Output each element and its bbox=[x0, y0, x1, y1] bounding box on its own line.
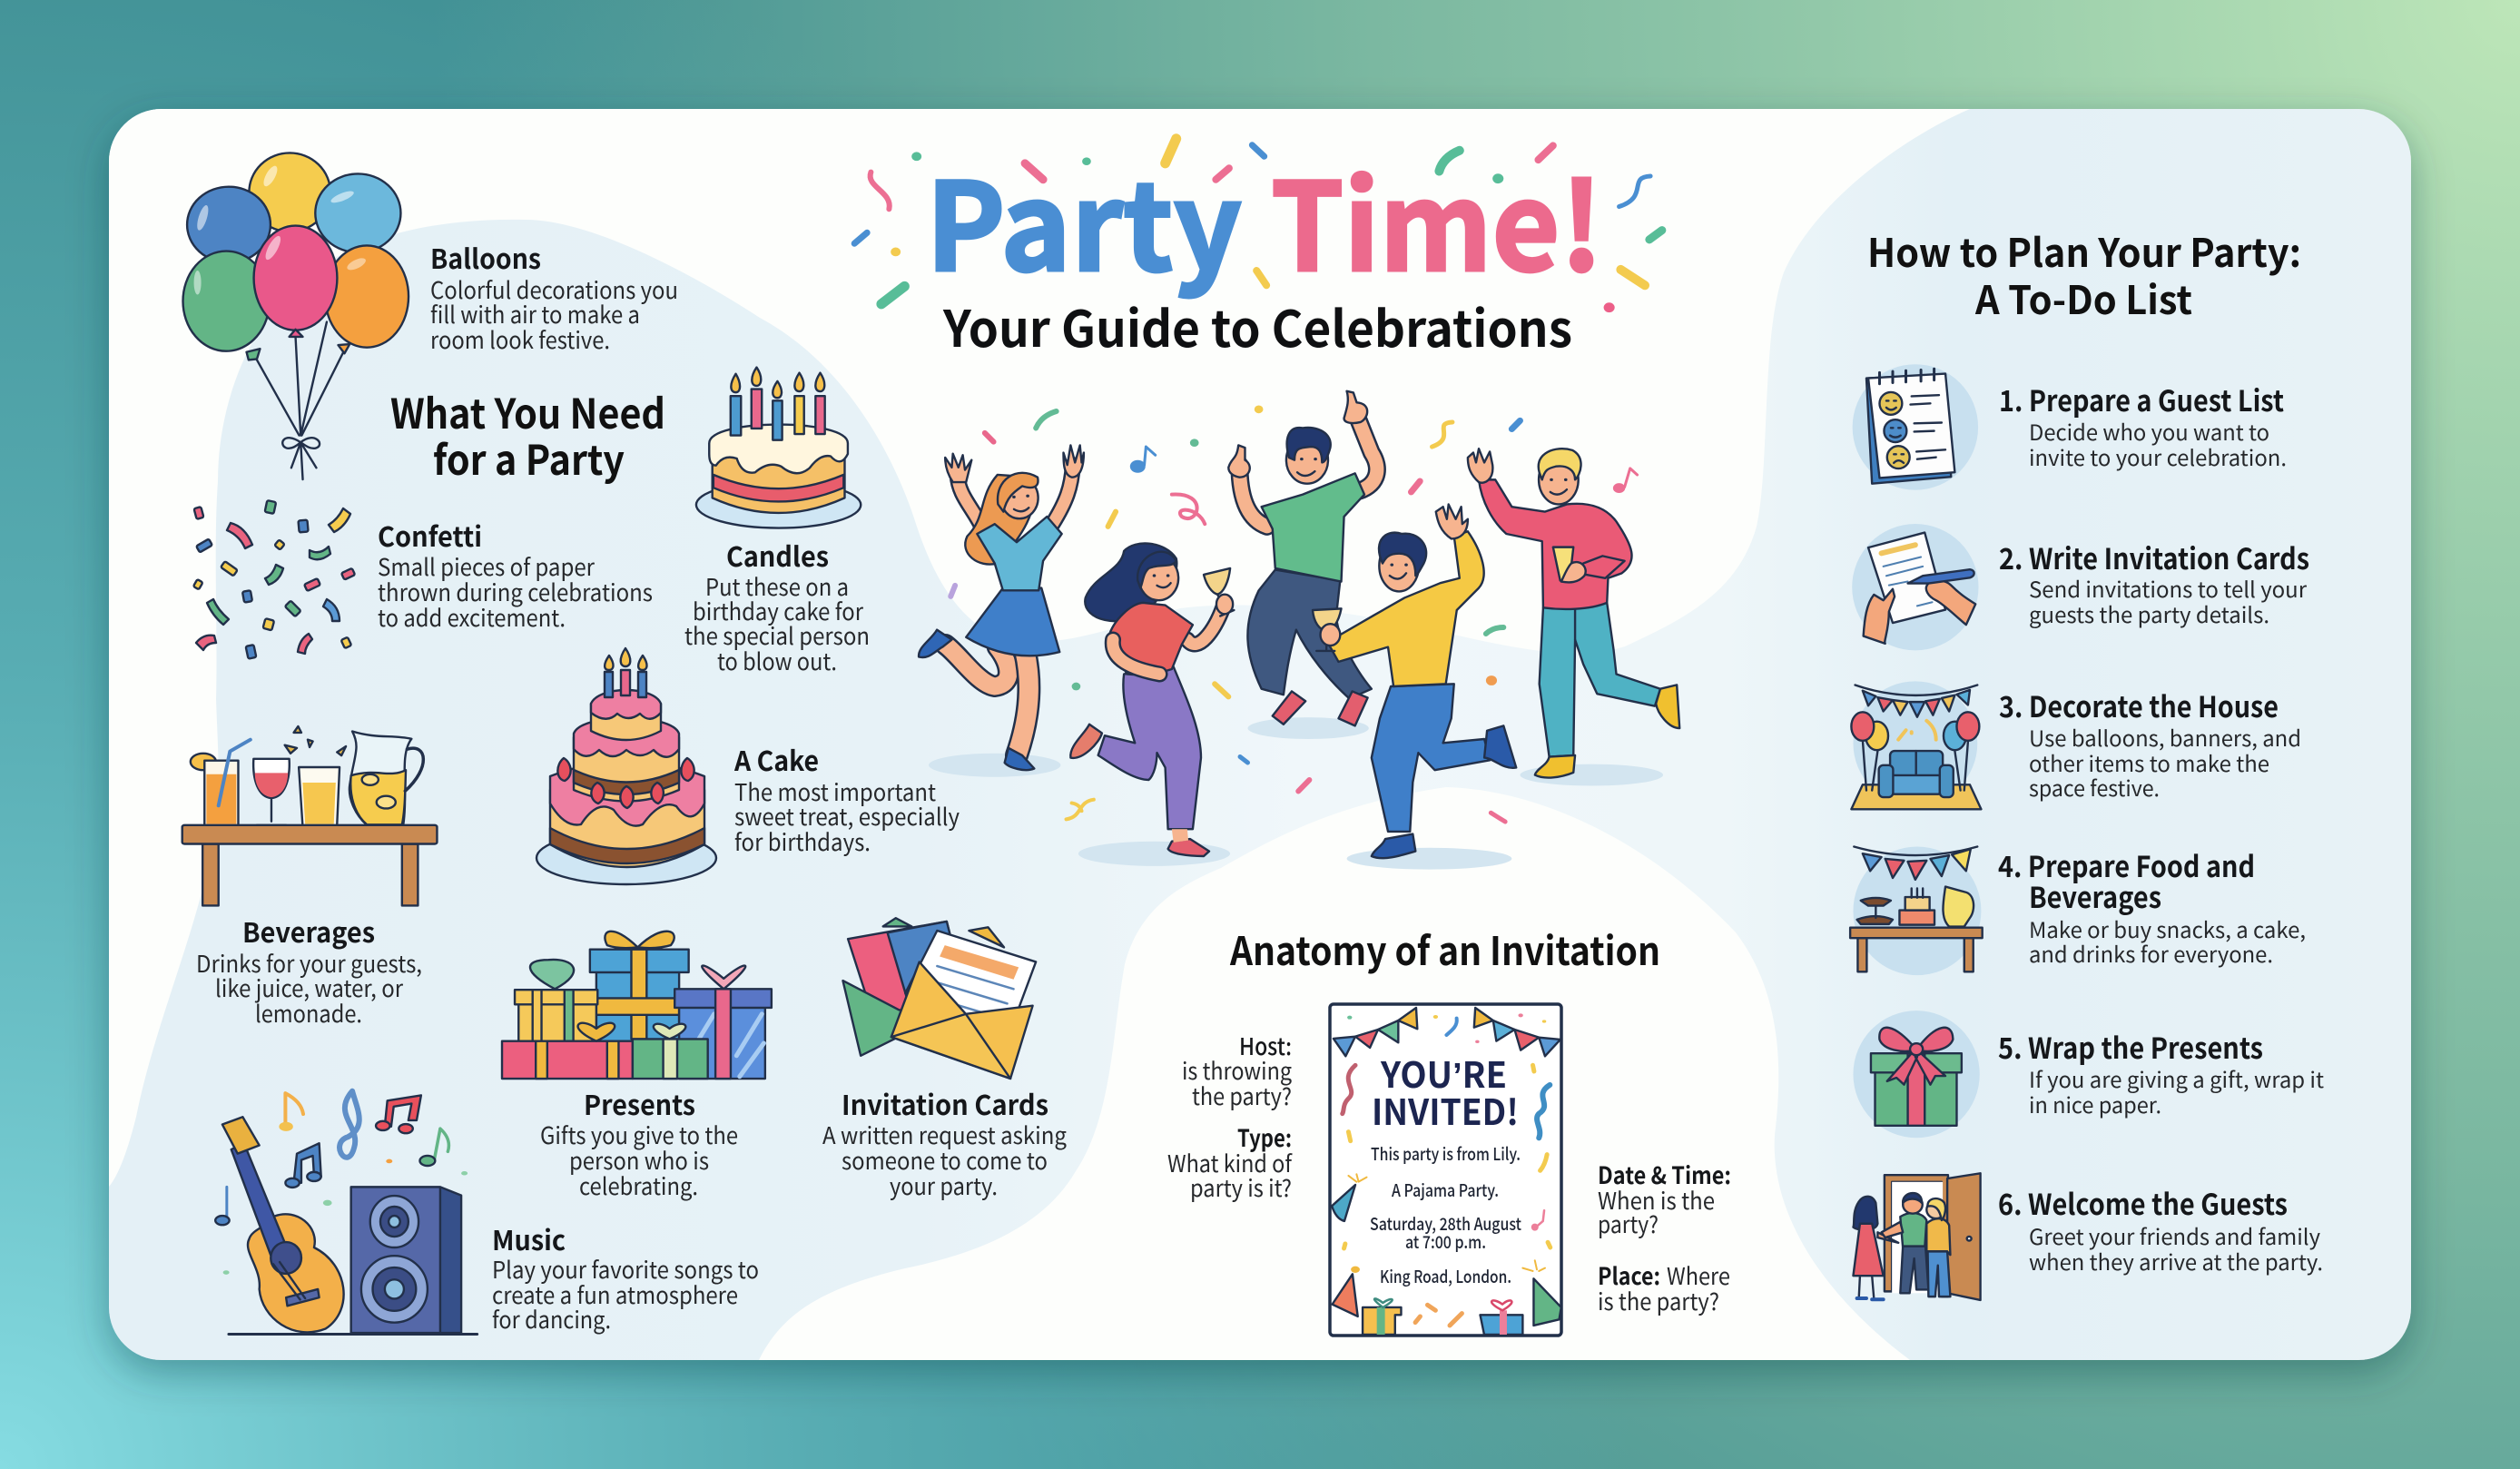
heading: to-do list: A To-Do List bbox=[1974, 270, 2192, 326]
text: step 1: invite to your celebration. bbox=[2029, 440, 2287, 472]
text: step 4: and drinks for everyone. bbox=[2029, 937, 2273, 969]
title block bbox=[854, 130, 1662, 361]
text: beverages bbox=[196, 911, 422, 1030]
text: step 5: in nice paper. bbox=[2029, 1088, 2161, 1119]
card text: INVITED! bbox=[1372, 1085, 1519, 1136]
labels left: host and type bbox=[1167, 1029, 1293, 1204]
text: balloons: room look festive. bbox=[430, 322, 610, 356]
text: candles: Put these on a bbox=[705, 569, 849, 603]
text: step 5: 5. Wrap the Presents bbox=[1998, 1026, 2263, 1068]
icon: birthday cake with candles bbox=[696, 368, 861, 528]
dancer: woman in blue dress bbox=[919, 445, 1084, 770]
text: step 5 bbox=[1998, 1026, 2324, 1119]
text: music: Music bbox=[492, 1218, 566, 1258]
text: invitation cards bbox=[822, 1083, 1067, 1202]
main rounded card bbox=[109, 109, 2411, 1360]
text: a cake bbox=[733, 739, 960, 858]
dance confetti bbox=[950, 406, 1638, 822]
text: balloons: Colorful decorations you bbox=[430, 272, 678, 306]
text: presents: person who is bbox=[569, 1143, 709, 1177]
text: music: create a fun atmosphere bbox=[492, 1277, 738, 1311]
card decorations bbox=[1332, 1008, 1561, 1335]
labels right: date, time and place: Place: bbox=[1598, 1258, 1660, 1292]
icon: tiered cake bbox=[536, 648, 716, 884]
text: invitation cards: Invitation Cards bbox=[842, 1083, 1048, 1123]
text: step 2 bbox=[1999, 537, 2309, 629]
title confetti bbox=[854, 139, 1662, 312]
subtitle: Your Guide to Celebrations bbox=[942, 289, 1572, 361]
text: step 1: 1. Prepare a Guest List bbox=[1999, 379, 2284, 420]
text: candles bbox=[684, 535, 870, 677]
labels left: host and type: Host: bbox=[1239, 1029, 1292, 1062]
labels right: date, time and place: Date & Time: bbox=[1598, 1158, 1731, 1191]
text: step 4: Make or buy snacks, a cake, bbox=[2029, 912, 2306, 944]
labels right: date, time and place: party? bbox=[1598, 1207, 1659, 1240]
text: step 1: Decide who you want to bbox=[2029, 415, 2269, 447]
text: step 6: Greet your friends and family bbox=[2029, 1219, 2320, 1251]
text: step 4: 4. Prepare Food and bbox=[1998, 844, 2255, 886]
text: step 3: Use balloons, banners, and bbox=[2029, 721, 2301, 753]
text: step 2: guests the party details. bbox=[2029, 597, 2269, 629]
text: beverages: lemonade. bbox=[255, 996, 362, 1030]
text: step 6 bbox=[1998, 1182, 2323, 1277]
heading: to-do list: How to Plan Your Party: bbox=[1867, 222, 2301, 279]
labels right: date, time and place: When is the bbox=[1598, 1183, 1715, 1217]
icon: welcoming guests at the door bbox=[1853, 1173, 1981, 1300]
text: candles: Candles bbox=[726, 535, 829, 575]
labels left: host and type: party is it? bbox=[1190, 1170, 1292, 1204]
labels left: host and type: Type: bbox=[1237, 1120, 1292, 1154]
text: a cake: sweet treat, especially bbox=[734, 799, 960, 833]
icon: guitar, speaker and music notes bbox=[215, 1091, 477, 1335]
text: balloons: fill with air to make a bbox=[430, 297, 640, 330]
card text: Saturday, 28th August bbox=[1370, 1211, 1521, 1236]
labels left: host and type: What kind of bbox=[1167, 1146, 1293, 1179]
icon: wrapped gift bbox=[1853, 1011, 1980, 1138]
text: a cake: for birthdays. bbox=[734, 824, 871, 858]
text: presents: Presents bbox=[584, 1083, 695, 1123]
labels left: host and type: is throwing bbox=[1182, 1053, 1292, 1087]
text: a cake: The most important bbox=[734, 774, 936, 808]
text: invitation cards: someone to come to bbox=[842, 1143, 1048, 1177]
text: step 5: If you are giving a gift, wrap it bbox=[2029, 1062, 2324, 1094]
text: step 6: when they arrive at the party. bbox=[2029, 1245, 2323, 1277]
text: step 6: 6. Welcome the Guests bbox=[1998, 1182, 2288, 1224]
title: Party Time!: Party bbox=[926, 130, 1242, 306]
text: music bbox=[492, 1218, 759, 1336]
icon: confetti bbox=[193, 500, 355, 659]
dancer: woman in red top bbox=[1070, 543, 1234, 856]
text: step 1 bbox=[1999, 379, 2287, 472]
labels left: host and type: the party? bbox=[1192, 1079, 1292, 1112]
sample invitation card bbox=[1330, 1004, 1561, 1336]
panel: how to plan your party bbox=[1850, 222, 2324, 1300]
text: step 2: 2. Write Invitation Cards bbox=[1999, 537, 2309, 578]
labels right: date, time and place: Where bbox=[1667, 1258, 1730, 1292]
text: balloons bbox=[430, 237, 678, 356]
text: invitation cards: your party. bbox=[890, 1168, 998, 1202]
text: a cake: A Cake bbox=[733, 739, 819, 779]
card text: King Road, London. bbox=[1380, 1264, 1511, 1288]
labels right: date, time and place bbox=[1598, 1158, 1731, 1317]
card text: This party is from Lily. bbox=[1371, 1141, 1521, 1166]
text: candles: to blow out. bbox=[717, 644, 837, 677]
panel: anatomy of an invitation bbox=[1167, 921, 1731, 1336]
text: beverages: Beverages bbox=[242, 911, 375, 951]
text: confetti: Confetti bbox=[378, 515, 482, 555]
text: step 3: 3. Decorate the House bbox=[1999, 685, 2279, 726]
text: beverages: like juice, water, or bbox=[215, 971, 404, 1004]
text: presents: celebrating. bbox=[579, 1168, 698, 1202]
text: confetti: thrown during celebrations bbox=[378, 575, 653, 608]
text: confetti: to add excitement. bbox=[378, 600, 566, 634]
card text: at 7:00 p.m. bbox=[1405, 1229, 1486, 1254]
icon: writing invitation bbox=[1852, 524, 1979, 650]
dancer: man in yellow sweater bbox=[1313, 504, 1516, 858]
text: music: for dancing. bbox=[492, 1302, 611, 1336]
icon: presents bbox=[502, 932, 772, 1079]
heading: to-do list bbox=[1867, 222, 2301, 326]
text: step 4: Beverages bbox=[2029, 875, 2161, 917]
icon: food and beverages table bbox=[1850, 847, 1983, 975]
text: step 2: Send invitations to tell your bbox=[2029, 572, 2308, 604]
dancer: man in green shirt bbox=[1228, 391, 1377, 725]
icon: balloons bbox=[183, 153, 409, 479]
labels right: date, time and place: is the party? bbox=[1598, 1284, 1719, 1317]
text: candles: the special person bbox=[684, 618, 870, 652]
card text: YOU’RE bbox=[1380, 1048, 1507, 1099]
text: step 3: other items to make the bbox=[2029, 746, 2269, 778]
text: candles: birthday cake for bbox=[693, 594, 864, 627]
text: step 3: space festive. bbox=[2029, 771, 2160, 803]
heading: what you need: What You Need bbox=[390, 381, 665, 440]
heading: what you need: for a Party bbox=[433, 428, 625, 487]
illustration: five dancing friends bbox=[919, 391, 1679, 870]
panel: what you need for a party bbox=[182, 153, 1067, 1336]
text: confetti: Small pieces of paper bbox=[378, 549, 596, 583]
icon: guest list notepad bbox=[1853, 364, 1978, 490]
text: presents bbox=[540, 1083, 738, 1202]
floor shadows bbox=[929, 717, 1663, 870]
text: beverages: Drinks for your guests, bbox=[196, 946, 422, 980]
heading: anatomy of an invitation: Anatomy of an Invitation bbox=[1229, 921, 1660, 977]
icon: decorated room bbox=[1851, 681, 1981, 809]
text: presents: Gifts you give to the bbox=[540, 1118, 738, 1151]
text: step 4 bbox=[1998, 844, 2306, 969]
text: step 3 bbox=[1999, 685, 2301, 803]
icon: invitation cards and envelopes bbox=[842, 918, 1036, 1079]
dancer: man in pink sweater bbox=[1468, 449, 1679, 778]
heading: what you need bbox=[390, 381, 665, 487]
text: invitation cards: A written request asking bbox=[822, 1118, 1067, 1151]
text: music: Play your favorite songs to bbox=[492, 1252, 759, 1286]
title block: Time! bbox=[1271, 130, 1603, 306]
card text: A Pajama Party. bbox=[1392, 1178, 1499, 1202]
text: confetti bbox=[378, 515, 653, 634]
icon: beverages on a table bbox=[182, 726, 437, 905]
text: balloons: Balloons bbox=[430, 237, 541, 277]
card text bbox=[1370, 1048, 1521, 1288]
